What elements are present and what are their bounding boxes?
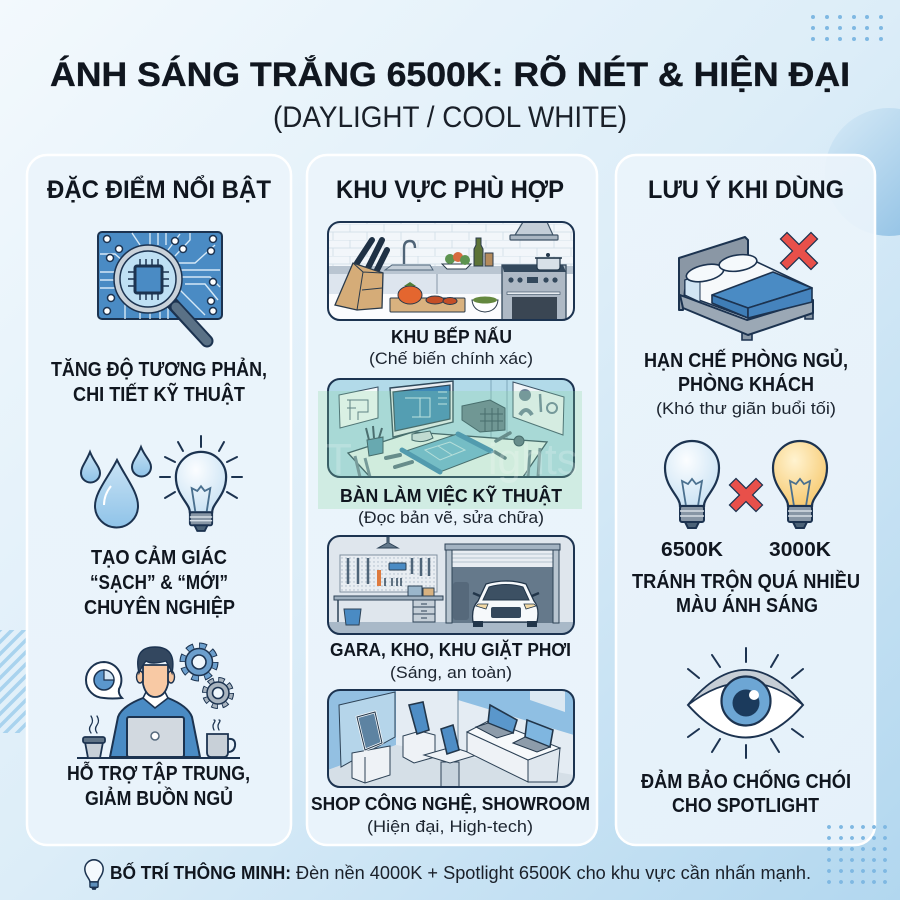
icon: gears [184,646,230,706]
icon: person at laptop [77,646,240,758]
label: khu bếp nấu [369,326,533,368]
label: gara kho: GARA, KHO, KHU GIẶT PHƠI [330,639,571,660]
text: chống chói: CHO SPOTLIGHT [672,794,819,817]
text: hạn chế phòng ngủ: (Khó thư giãn buổi tối) [656,399,836,418]
text: cảm giác sạch mới: “SẠCH” & “MỚI” [90,570,228,594]
label: shop công nghệ: (Hiện đại, High-tech) [367,817,533,836]
label: shop công nghệ: SHOP CÔNG NGHỆ, SHOWROOM [311,793,590,814]
scene: garage [328,536,574,634]
decorative dots bottom right [827,825,887,884]
text: hỗ trợ tập trung: GIẢM BUỒN NGỦ [85,786,233,810]
scene: tech showroom [328,690,574,787]
label: shop công nghệ [311,793,590,836]
subtitle: (DAYLIGHT / COOL WHITE) [273,101,627,134]
text: tăng độ tương phản: CHI TIẾT KỸ THUẬT [73,382,245,406]
text: cảm giác sạch mới [84,546,235,619]
text: cảm giác sạch mới: CHUYÊN NGHIỆP [84,595,235,619]
text: hạn chế phòng ngủ [644,348,848,418]
heading: ĐẶC ĐIỂM NỔI BẬT [47,174,271,204]
label: bàn làm việc kỹ thuật: (Đọc bản vẽ, sửa chữa) [358,508,544,527]
panel: đặc điểm nổi bật [27,155,291,845]
label: bàn làm việc kỹ thuật [340,485,562,527]
text: hỗ trợ tập trung: HỖ TRỢ TẬP TRUNG, [67,761,250,785]
icon: coffee cups [83,716,235,758]
label: gara kho: (Sáng, an toàn) [390,663,512,682]
decorative dots top right [811,15,883,41]
footer text regular: Đèn nền 4000K + Spotlight 6500K cho khu vực cần nhấn mạnh. [296,862,811,883]
bulb labels [661,538,831,561]
heading: KHU VỰC PHÙ HỢP [336,174,564,204]
title: ÁNH SÁNG TRẮNG 6500K: RÕ NÉT & HIỆN ĐẠI [50,54,850,94]
label: khu bếp nấu: KHU BẾP NẤU [391,326,512,347]
label: gara kho [330,639,571,682]
scene: kitchen [328,222,574,320]
icon: footer bulb [85,860,103,889]
text: hỗ trợ tập trung [67,761,250,810]
bulb labels: 6500K [661,538,723,561]
bulb labels: 3000K [769,538,831,561]
text: cảm giác sạch mới: TẠO CẢM GIÁC [91,546,227,569]
icon: clock speech bubble [86,662,122,698]
decorative circle top right [825,108,900,236]
text: tăng độ tương phản [51,357,267,406]
label: khu bếp nấu: (Chế biến chính xác) [369,349,533,368]
icon: circuit board and magnifier [98,232,222,341]
icon: 3000K bulb [773,441,827,528]
icon: water drops [81,447,151,528]
icon: red cross [787,239,811,263]
panel: lưu ý khi dùng [616,155,875,845]
label: bàn làm việc kỹ thuật: BÀN LÀM VIỆC KỸ THUẬT [340,485,562,506]
decorative diagonal stripes left [0,630,26,733]
icon: eye with glare rays [688,648,803,758]
text: chống chói [641,769,851,817]
panel: khu vực phù hợp [307,155,597,845]
icon: bed with cross [679,237,813,340]
icon: 6500K bulb [665,441,719,528]
text: chống chói: ĐẢM BẢO CHỐNG CHÓI [641,769,851,793]
footer text bold: BỐ TRÍ THÔNG MINH: [110,862,291,883]
text: tăng độ tương phản: TĂNG ĐỘ TƯƠNG PHẢN, [51,357,267,381]
icon: glowing bulb [160,436,242,531]
watermark overlay [318,391,582,509]
text: hạn chế phòng ngủ: HẠN CHẾ PHÒNG NGỦ, [644,348,848,372]
watermark overlay: ights [488,435,578,484]
text: hạn chế phòng ngủ: PHÒNG KHÁCH [678,372,814,396]
icon: red cross between bulbs [736,485,756,505]
footer note [85,860,811,889]
text: tránh trộn màu: MÀU ÁNH SÁNG [676,594,818,617]
heading: LƯU Ý KHI DÙNG [648,174,844,204]
watermark overlay: T [325,435,352,484]
text: tránh trộn màu: TRÁNH TRỘN QUÁ NHIỀU [632,569,860,593]
scene: technical desk [328,379,574,477]
text: tránh trộn màu [632,569,860,617]
